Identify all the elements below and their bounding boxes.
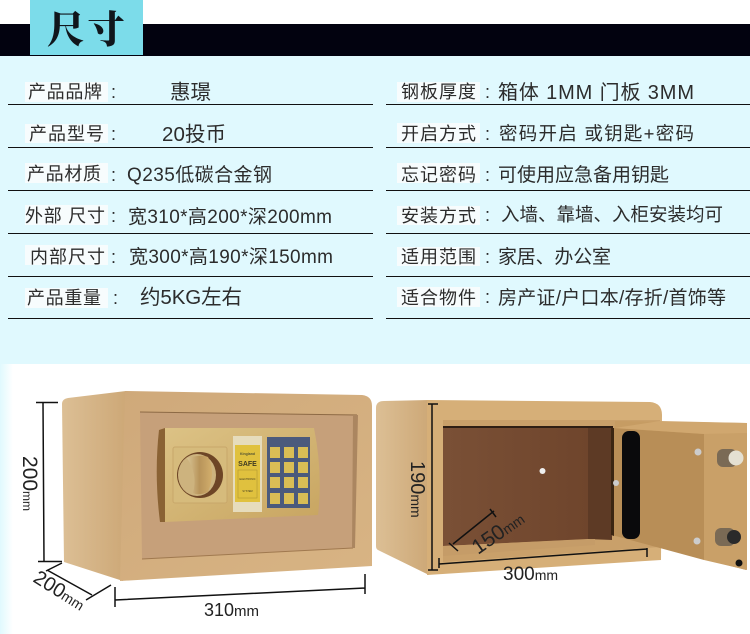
row: forgotten password bbox=[386, 163, 750, 190]
row: scope: 适用范围 bbox=[401, 247, 476, 267]
dimension: depth 200mm bbox=[29, 563, 111, 615]
row: model: 20投币 bbox=[162, 123, 226, 146]
row: brand bbox=[8, 81, 373, 104]
lock label: SYSTEM bbox=[242, 490, 253, 493]
door screws bbox=[613, 448, 702, 544]
row: suitable items: 房产证/户口本/存折/首饰等 bbox=[498, 287, 726, 309]
panel: right specifications bbox=[386, 81, 750, 318]
row: forgotten password: 忘记密码 bbox=[401, 165, 476, 185]
dimension: height 190mm bbox=[406, 404, 438, 570]
row: inner dimensions: 内部尺寸 bbox=[30, 247, 105, 267]
row: forgotten password: 可使用应急备用钥匙 bbox=[498, 164, 669, 186]
row: steel thickness bbox=[386, 81, 750, 104]
open door bbox=[611, 421, 747, 570]
row: steel thickness: : bbox=[485, 82, 490, 102]
row: brand: 产品品牌 bbox=[28, 82, 102, 102]
lock label: ELECTRONIC bbox=[239, 478, 256, 481]
row: weight: 约5KG左右 bbox=[140, 286, 242, 309]
row: installation bbox=[386, 204, 750, 234]
open safe front bbox=[427, 400, 662, 575]
dimension: depth 150mm bbox=[449, 507, 529, 559]
row: model bbox=[8, 123, 373, 148]
dimension: width 310mm bbox=[115, 574, 365, 620]
open safe bbox=[376, 400, 747, 575]
row: suitable items: : bbox=[485, 287, 490, 307]
row: model: 产品型号 bbox=[29, 124, 104, 144]
lock plate bbox=[157, 428, 320, 522]
safe interior bbox=[443, 420, 660, 562]
row: opening method: : bbox=[485, 124, 490, 144]
row: steel thickness: 箱体 1MM 门板 3MM bbox=[498, 81, 694, 104]
row: brand: : bbox=[111, 82, 116, 102]
lock label bbox=[233, 436, 262, 512]
safe door bbox=[140, 412, 358, 559]
row: scope: 家居、办公室 bbox=[498, 246, 611, 268]
row: material: Q235低碳合金钢 bbox=[127, 164, 272, 186]
row: opening method: 开启方式 bbox=[401, 124, 476, 144]
row: scope: : bbox=[485, 247, 490, 267]
row: installation: 入墙、靠墙、入柜安装均可 bbox=[501, 204, 723, 225]
keypad bbox=[267, 437, 310, 508]
row: weight: : bbox=[113, 288, 118, 308]
icon: dial bbox=[177, 452, 223, 498]
title: 尺寸 bbox=[47, 0, 125, 54]
row: installation: : bbox=[485, 205, 490, 225]
row: inner dimensions: : bbox=[111, 247, 116, 267]
safe front bbox=[120, 391, 372, 581]
row: brand: 惠璟 bbox=[170, 81, 211, 104]
row: material bbox=[8, 163, 373, 190]
lock label: SAFE bbox=[238, 461, 257, 468]
row: scope bbox=[386, 246, 750, 276]
dimension: height 200mm bbox=[18, 402, 62, 562]
row: material: 产品材质 bbox=[27, 164, 101, 184]
row: inner dimensions bbox=[8, 245, 373, 276]
row: steel thickness: 钢板厚度 bbox=[401, 82, 476, 102]
open safe side bbox=[376, 400, 429, 575]
dimension: depth 150mm: 150mm bbox=[468, 507, 529, 559]
row: suitable items bbox=[386, 287, 750, 318]
row: model: : bbox=[111, 124, 116, 144]
dimension: width 300mm bbox=[439, 548, 647, 585]
row: inner dimensions: 宽300*高190*深150mm bbox=[129, 246, 333, 268]
row: opening method: 密码开启 或钥匙+密码 bbox=[499, 123, 694, 144]
panel: left specifications bbox=[8, 81, 373, 318]
row: outer dimensions bbox=[8, 205, 373, 234]
header band bbox=[0, 24, 750, 56]
row: outer dimensions: : bbox=[111, 206, 116, 226]
safe side bbox=[62, 391, 126, 581]
door bolts bbox=[715, 449, 744, 566]
row: opening method bbox=[386, 123, 750, 148]
title bbox=[30, 0, 143, 55]
closed safe bbox=[62, 391, 372, 581]
row: forgotten password: : bbox=[485, 165, 490, 185]
row: outer dimensions: 宽310*高200*深200mm bbox=[128, 206, 332, 228]
dimension: width 310mm: 310mm bbox=[204, 600, 259, 620]
dimension: depth 200mm: 200mm bbox=[29, 567, 89, 615]
row: suitable items: 适合物件 bbox=[401, 288, 476, 308]
dimension: width 300mm: 300mm bbox=[503, 564, 558, 585]
row: weight bbox=[8, 286, 373, 318]
row: installation: 安装方式 bbox=[401, 206, 476, 226]
dimension: height 190mm: 190 mm bbox=[406, 461, 428, 518]
row: weight: 产品重量 bbox=[27, 288, 101, 308]
lock label: Kingland bbox=[240, 452, 255, 456]
row: material: : bbox=[111, 165, 116, 185]
dimension: height 200mm: 200 mm bbox=[18, 456, 41, 511]
row: outer dimensions: 外部 尺寸 bbox=[25, 206, 105, 226]
door handle bbox=[622, 431, 640, 539]
